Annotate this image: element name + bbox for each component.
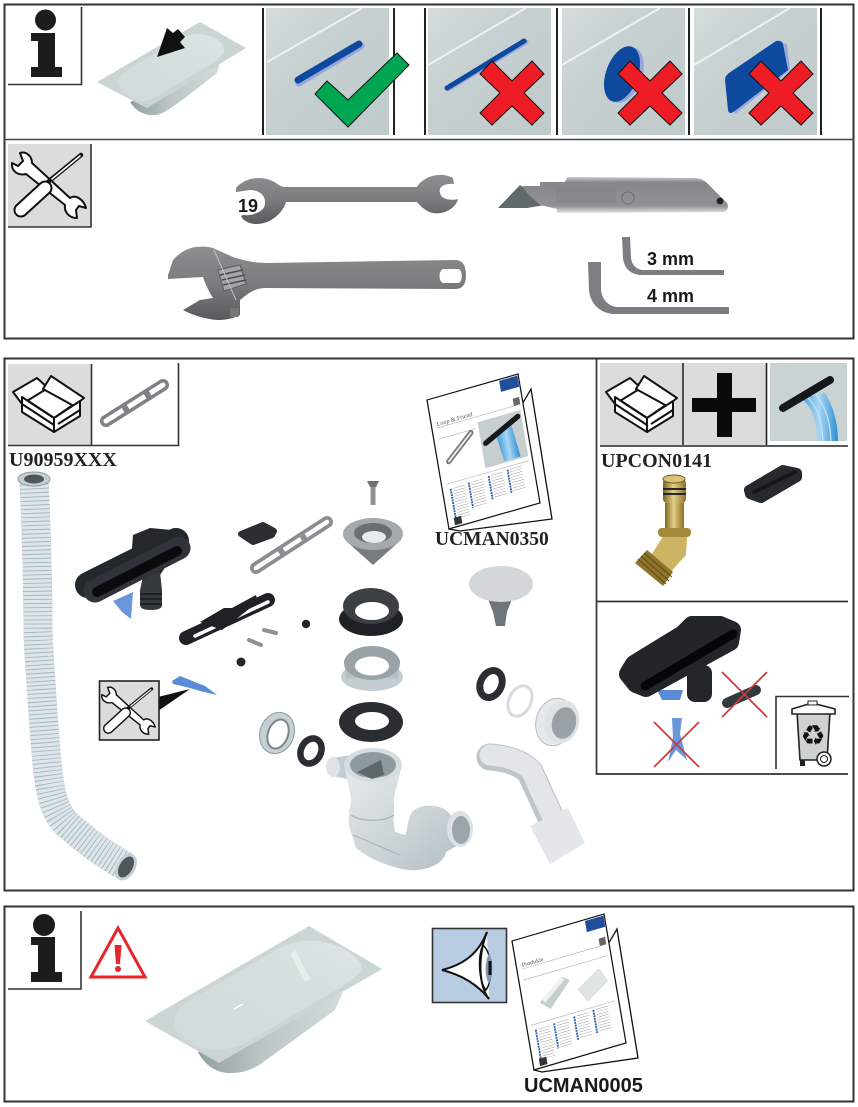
part: flexible corrugated hose [18,472,139,882]
icon: red cross [618,61,682,125]
icon: tools needed for clip [100,681,190,740]
part: angled overflow pipe [490,755,585,864]
document: product manual UCMAN0350 [427,374,552,531]
icon: red cross [749,61,813,125]
panel: optional accessory UPCON0141 [596,358,849,774]
panel: check cut-out and tools frame [4,4,854,338]
panel: contents of the package [4,358,854,890]
manual image: slot plate [445,433,474,461]
tool: 3 mm hex key [622,237,724,275]
icon: recycling bin [776,696,849,769]
part: black ring seal [296,735,326,767]
part: black slot cover [749,470,797,498]
document: product manual UCMAN0005 [512,914,638,1072]
label: 3 mm: 3 mm [647,249,694,269]
part: drain screw [367,481,379,505]
label: article number UPCON0141: UPCON0141 [601,450,712,472]
part: flat black gasket [339,702,403,742]
part: discarded blue clip crossed out [654,718,699,767]
part: black rubber seal [339,588,403,636]
part: small black cover [241,525,274,542]
manual image: bathtub and tray [537,964,610,1014]
part: white threaded nut [530,694,584,750]
manual image: shower jet [478,410,528,468]
label: 4 mm: 4 mm [647,286,694,306]
label: article number U90959XXX: U90959XXX [9,449,117,471]
icon: information [8,7,82,84]
icon: information [8,911,81,989]
part: stopper cap [469,566,533,626]
tool: utility knife [498,177,728,213]
recycling symbol: ♻ [800,719,826,752]
panel: slot too round [562,8,690,135]
part: brass elbow fitting [635,475,691,586]
label: wrench size: 19 [238,196,258,216]
icon: read manual eye [432,928,506,1002]
part: black retaining frame [186,595,268,638]
part: drain trap [326,748,473,870]
logo block [499,376,519,392]
part: black ring seal [476,667,506,701]
label: manual number UCMAN0350: UCMAN0350 [435,529,549,550]
icon: green check mark [315,53,409,127]
illustration: large bathtub [145,926,382,1073]
part: slot plate [256,522,327,568]
part: threaded nut [254,707,300,759]
part: drain strainer [343,518,403,565]
part: discarded cover crossed out [722,672,767,717]
panel: slot too narrow and long [424,8,558,135]
tool: 4 mm hex key [588,262,729,314]
panel: handling bathtub and product manual [4,906,854,1102]
icon: box plus shower jet [600,363,848,446]
manual language list [535,1008,607,1060]
part: overflow nozzle [88,528,182,619]
part: nozzle with removable parts [628,625,733,702]
part: blue clip [172,676,217,695]
logo block [585,916,605,932]
label: manual number UCMAN0005: UCMAN0005 [524,1075,643,1097]
tool: open-end wrench size 19 [236,175,458,224]
manual title: Produkte [522,957,544,969]
part: silver ring [341,646,403,691]
manual title: Loop & Friend [437,412,473,428]
manual language list [450,467,521,519]
part: screws and nuts [236,620,310,666]
part: thin white ring [503,682,537,720]
panel: slot too large [694,8,822,135]
panel: correct slot opening [262,8,409,135]
illustration: small bathtub with arrow [97,22,246,115]
QR code [539,1057,547,1066]
icon: box contents with slot plate [8,363,178,446]
icon: shower jet slot [770,363,847,441]
icon: warning triangle [91,928,145,977]
icon: tools required [8,144,91,227]
QR code [454,516,462,525]
icon: plus [692,373,756,437]
icon: red cross [480,61,544,125]
tool: adjustable wrench [168,247,466,320]
